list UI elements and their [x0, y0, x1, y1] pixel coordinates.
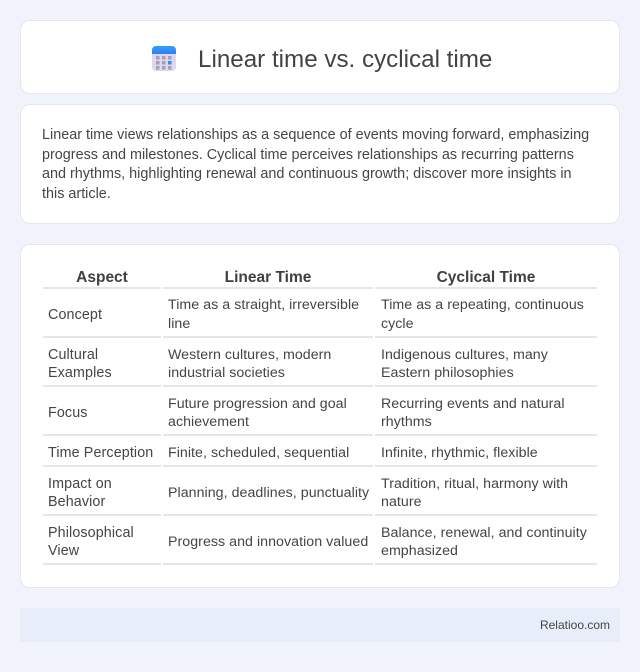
row: focus: Focus — [48, 405, 88, 421]
row: philosophical view: Philosophical — [48, 525, 134, 541]
intro paragraph: and rhythms, highlighting renewal and continuous growth; discover more insights in — [42, 166, 572, 182]
row: impact on behavior: Impact on — [48, 476, 112, 492]
row: philosophical view — [43, 525, 597, 565]
row: cultural examples: Eastern philosophies — [381, 365, 514, 381]
row: philosophical view: emphasized — [381, 543, 458, 559]
table header — [43, 269, 597, 289]
row: focus: Recurring events and natural — [381, 396, 565, 412]
intro paragraph: this article. — [42, 186, 111, 202]
table header: Cyclical Time — [437, 269, 535, 286]
panel: comparison table — [20, 244, 620, 588]
table header: Linear Time — [225, 269, 311, 286]
row: concept — [43, 297, 597, 338]
title: Linear time vs. cyclical time — [198, 46, 492, 73]
row: cultural examples — [43, 347, 597, 387]
row: focus: achievement — [168, 414, 249, 430]
row: concept: Concept — [48, 307, 102, 323]
row: cultural examples: industrial societies — [168, 365, 285, 381]
footer text: Relatioo.com — [540, 618, 610, 632]
footer bar — [20, 608, 620, 642]
row: focus: rhythms — [381, 414, 432, 430]
row: time perception — [43, 445, 597, 467]
row: philosophical view: Progress and innovation valued — [168, 534, 368, 550]
row: focus: Future progression and goal — [168, 396, 347, 412]
row: impact on behavior: Tradition, ritual, harmony with — [381, 476, 568, 492]
row: impact on behavior: Behavior — [48, 494, 105, 510]
comparison table — [43, 269, 597, 565]
intro paragraph — [42, 127, 589, 202]
row: cultural examples: Western cultures, modern — [168, 347, 331, 363]
row: philosophical view: View — [48, 543, 79, 559]
row: time perception: Infinite, rhythmic, flexible — [381, 445, 538, 461]
table header: Aspect — [76, 269, 128, 286]
row: impact on behavior: Planning, deadlines, punctuality — [168, 485, 369, 501]
row: concept: Time as a straight, irreversible — [168, 297, 359, 313]
row: time perception: Finite, scheduled, sequential — [168, 445, 349, 461]
row: cultural examples: Indigenous cultures, many — [381, 347, 548, 363]
row: concept: Time as a repeating, continuous — [381, 297, 584, 313]
intro paragraph: Linear time views relationships as a sequence of events moving forward, emphasizing — [42, 127, 589, 143]
panel: intro text — [20, 104, 620, 224]
row: focus — [43, 396, 597, 436]
row: cultural examples: Cultural — [48, 347, 98, 363]
row: concept: cycle — [381, 316, 414, 332]
row: impact on behavior: nature — [381, 494, 422, 510]
icon: calendar — [152, 46, 176, 71]
row: impact on behavior — [43, 476, 597, 516]
intro paragraph: progress and milestones. Cyclical time perceives relationships as recurring patterns — [42, 146, 574, 162]
row: time perception: Time Perception — [48, 445, 153, 461]
row: concept: line — [168, 316, 190, 332]
panel: title card — [20, 20, 620, 94]
row: philosophical view: Balance, renewal, and continuity — [381, 525, 587, 541]
row: cultural examples: Examples — [48, 365, 112, 381]
